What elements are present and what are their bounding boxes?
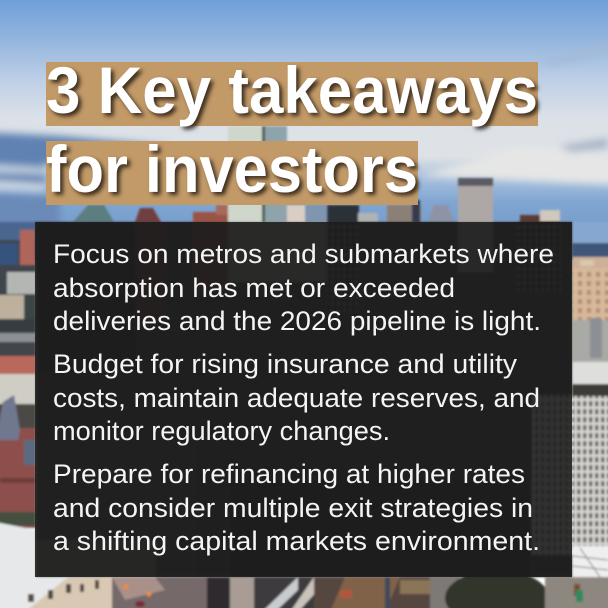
takeaway 3: a shifting capital markets environment. (53, 526, 540, 556)
takeaway 3: Prepare for refinancing at higher rates (53, 459, 525, 489)
takeaway 2: monitor regulatory changes. (53, 416, 390, 446)
sky (0, 0, 608, 260)
takeaway 2 (53, 349, 540, 446)
takeaway 1: Focus on metros and submarkets where (53, 239, 554, 269)
title highlight line 1 (46, 62, 538, 126)
title (46, 53, 538, 206)
takeaway 2: Budget for rising insurance and utility (53, 349, 518, 379)
takeaway 1: deliveries and the 2026 pipeline is light. (53, 306, 541, 336)
right city column (572, 222, 608, 244)
title line 2: for investors (46, 132, 418, 206)
takeaway 1: absorption has met or exceeded (53, 273, 455, 303)
takeaway 3 (53, 459, 540, 556)
panel: takeaways (35, 222, 572, 577)
skyline towers (73, 126, 560, 300)
takeaway 3: and consider multiple exit strategies in (53, 493, 533, 523)
takeaway 1 (53, 239, 554, 336)
takeaway 2: costs, maintain adequate reserves, and (53, 383, 540, 413)
city seen through panel (36, 222, 572, 577)
title highlight line 2 (46, 141, 418, 205)
bottom strip (15, 577, 112, 608)
left city column (0, 222, 36, 250)
title line 1: 3 Key takeaways (46, 53, 538, 127)
panel background (35, 222, 572, 577)
